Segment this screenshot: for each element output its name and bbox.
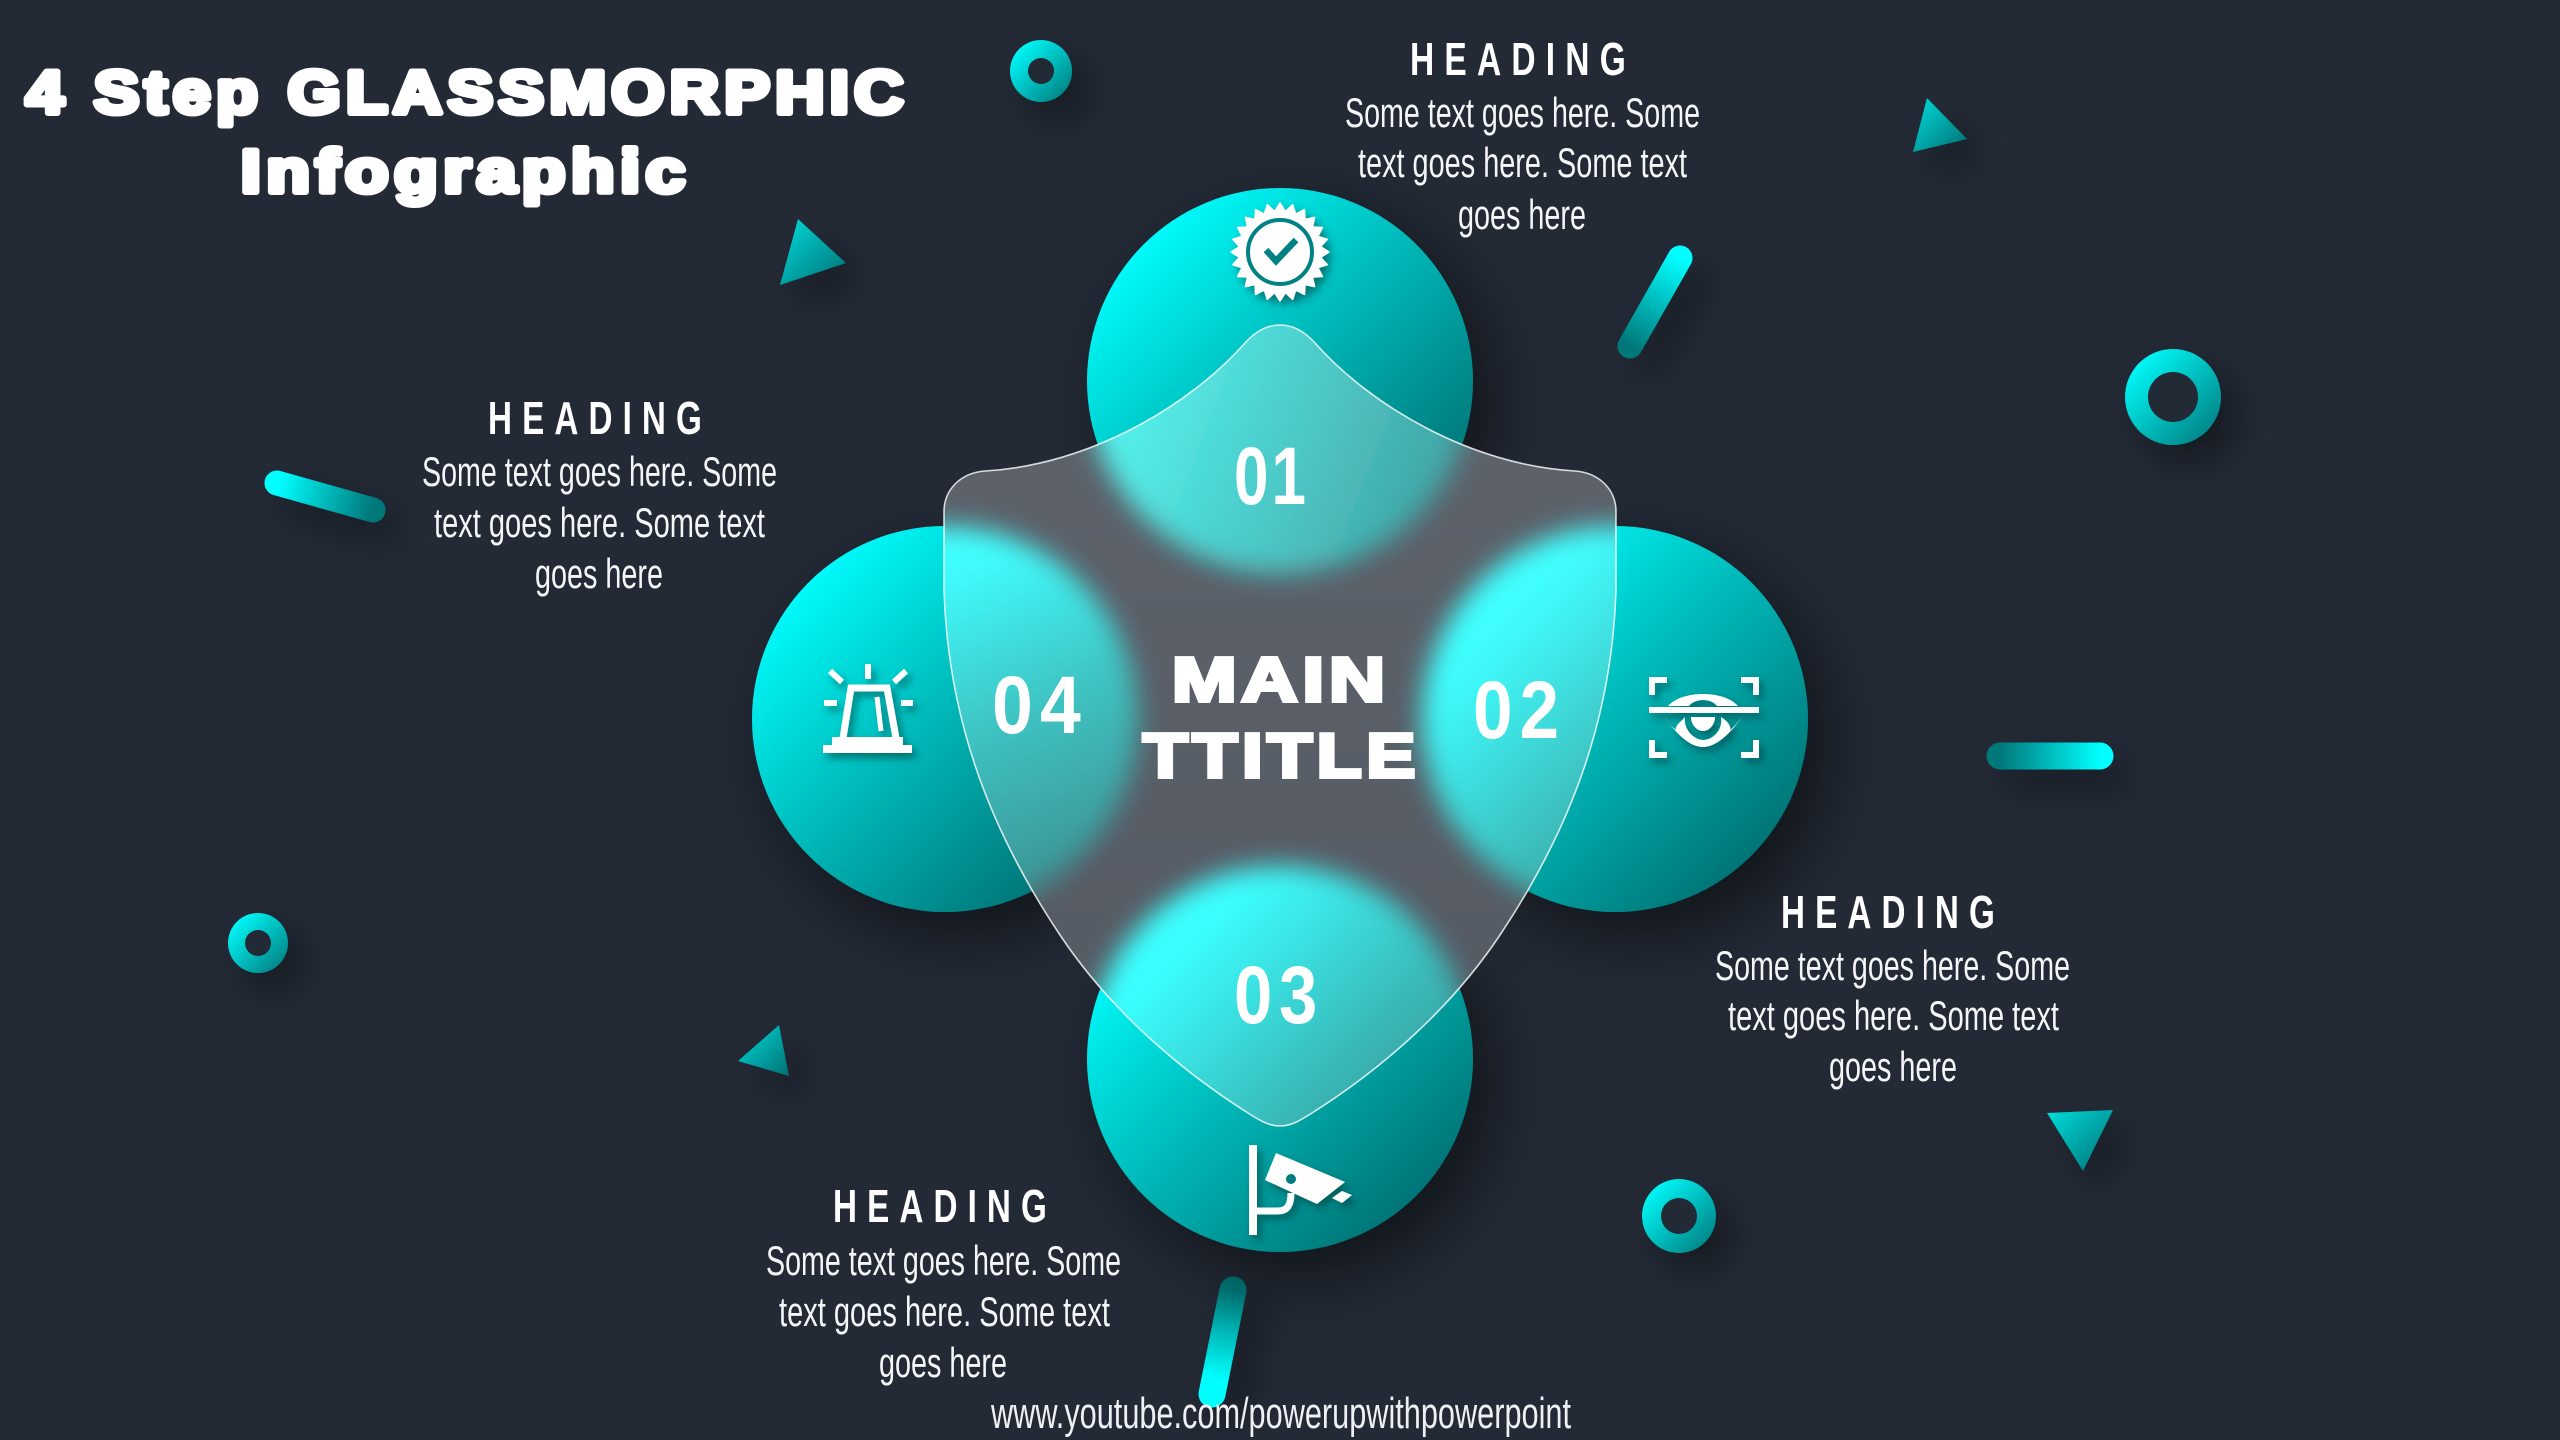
decorative pill: top right	[1630, 258, 1680, 346]
icon: eye scan	[1649, 677, 1759, 758]
footer url: www.youtube.com/powerupwithpowerpoint	[990, 1389, 1571, 1438]
number 03: 03	[1234, 950, 1324, 1041]
number 01: 01	[1234, 431, 1309, 522]
number 04: 04	[992, 660, 1088, 751]
text block: step 2: goes here	[1829, 1043, 1957, 1090]
text block: step 3: HEADING	[833, 1180, 1057, 1232]
decorative ring: top centre	[1010, 40, 1072, 102]
text block: step 2: HEADING	[1781, 886, 2005, 938]
text block: step 4: goes here	[535, 550, 663, 597]
decorative triangle: upper right	[1913, 98, 1967, 152]
text block: step 2: Some text goes here. Some	[1715, 942, 2070, 989]
text block: step 4: Some text goes here. Some	[422, 448, 777, 495]
decorative ring: right	[2125, 349, 2221, 445]
decorative triangle: lower right	[2047, 1110, 2113, 1171]
circle: step 1	[1087, 188, 1473, 574]
main title	[1143, 646, 1420, 791]
text block: step 3: Some text goes here. Some	[766, 1237, 1121, 1284]
text block: step 2: text goes here. Some text	[1728, 992, 2059, 1039]
decorative pill: left	[277, 483, 373, 510]
text block: step 3: text goes here. Some text	[779, 1288, 1110, 1335]
decorative ring: left	[228, 913, 288, 973]
title	[26, 59, 909, 205]
icon: siren	[823, 664, 913, 753]
title: 4 Step GLASSMORPHIC	[26, 59, 909, 126]
text block: step 3	[766, 1180, 1121, 1386]
icon: badge check	[1231, 203, 1329, 301]
circle: step 4	[752, 526, 1138, 912]
main title: MAIN	[1172, 646, 1390, 715]
text block: step 1: goes here	[1458, 191, 1586, 238]
title: Infographic	[241, 138, 691, 205]
text block: step 4: HEADING	[488, 392, 712, 444]
decorative triangle: lower left	[738, 1025, 789, 1076]
text block: step 1: text goes here. Some text	[1358, 139, 1687, 186]
text block: step 1: Some text goes here. Some	[1345, 89, 1700, 136]
decorative pill: bottom	[1212, 1290, 1233, 1394]
text block: step 1: HEADING	[1410, 33, 1636, 85]
decorative ring: bottom right	[1642, 1179, 1716, 1253]
icon: security camera	[1249, 1145, 1352, 1235]
panel: glass shield	[943, 324, 1617, 1127]
circle: step 3	[1087, 866, 1473, 1252]
text block: step 1	[1345, 33, 1700, 238]
number 02: 02	[1473, 665, 1566, 756]
decorative pill: right	[2000, 742, 2100, 770]
text block: step 4	[422, 392, 777, 597]
text block: step 2	[1715, 886, 2070, 1090]
decorative triangle: upper left	[780, 219, 846, 285]
main title: TTITLE	[1143, 722, 1420, 791]
text block: step 3: goes here	[879, 1339, 1007, 1386]
circle: step 2	[1422, 526, 1808, 912]
text block: step 4: text goes here. Some text	[434, 499, 765, 546]
